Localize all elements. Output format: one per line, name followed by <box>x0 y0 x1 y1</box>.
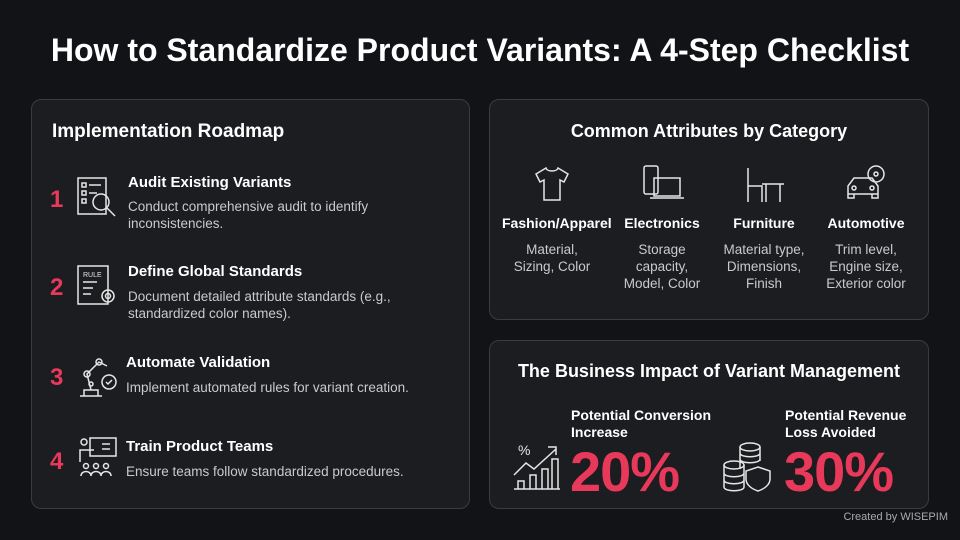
heading: roadmap: Implementation Roadmap <box>52 121 284 142</box>
category: automotive: Trim level, <box>835 242 897 257</box>
category: furniture: Finish <box>746 276 782 291</box>
stat: conversion <box>514 407 711 503</box>
step 1: 1 <box>50 186 63 213</box>
category: furniture: Material type, <box>723 242 805 257</box>
category: electronics <box>624 165 700 291</box>
step 1 <box>50 174 368 231</box>
step 4: 4 <box>50 448 63 475</box>
stat: revenue: Loss Avoided <box>785 424 876 440</box>
step 3: Automate Validation <box>126 354 270 371</box>
category: furniture: Furniture <box>733 215 795 231</box>
heading: attributes: Common Attributes by Category <box>571 121 847 141</box>
panel: common attributes <box>489 99 929 320</box>
step 3 <box>50 354 409 397</box>
panel: business impact <box>489 340 929 509</box>
icon: robot arm <box>80 358 117 397</box>
step 2 <box>50 263 391 321</box>
icon: growth chart <box>514 442 560 490</box>
step 4: Ensure teams follow standardized procedures. <box>126 464 404 479</box>
step 4: Train Product Teams <box>126 438 273 455</box>
icon: training <box>79 437 117 476</box>
step 2: 2 <box>50 274 63 301</box>
heading: impact: The Business Impact of Variant Management <box>518 361 900 381</box>
stat: revenue: Potential Revenue <box>785 407 906 423</box>
stat: revenue <box>723 407 906 503</box>
category: electronics: capacity, <box>636 259 688 274</box>
footer credit: Created by WISEPIM <box>843 511 948 523</box>
step 2: Define Global Standards <box>128 263 302 280</box>
category: automotive: Exterior color <box>826 276 906 291</box>
step 1: Conduct comprehensive audit to identify <box>128 199 368 214</box>
category: fashion: Material, <box>526 242 578 257</box>
stat: revenue: 30% <box>784 440 893 503</box>
step 4 <box>50 437 404 479</box>
step 3: Implement automated rules for variant creation. <box>126 380 409 395</box>
category: automotive <box>826 165 906 291</box>
icon: growth chart: % <box>518 442 530 458</box>
step 2: Document detailed attribute standards (e.g., <box>128 289 391 304</box>
category: electronics: Storage <box>638 242 686 257</box>
category: automotive: Engine size, <box>829 259 903 274</box>
stat: conversion: Potential Conversion <box>571 407 711 423</box>
title: How to Standardize Product Variants: A 4-Step Checklist <box>51 32 909 68</box>
category: fashion <box>502 166 612 274</box>
step 2: standardized color names). <box>128 306 291 321</box>
category: electronics: Electronics <box>624 215 700 231</box>
step 1: Audit Existing Variants <box>128 174 291 191</box>
category: automotive: Automotive <box>828 215 904 231</box>
category: electronics: Model, Color <box>624 276 700 291</box>
category: fashion: Sizing, Color <box>514 259 590 274</box>
category: furniture: Dimensions, <box>727 259 801 274</box>
icon: rule book: RULE <box>83 272 102 279</box>
panel: implementation roadmap <box>31 99 470 509</box>
category: furniture <box>723 168 805 291</box>
category: fashion: Fashion/Apparel <box>502 215 612 231</box>
icon: audit <box>77 177 116 216</box>
step 3: 3 <box>50 364 63 391</box>
step 1: inconsistencies. <box>128 216 223 231</box>
icon: coins shield <box>723 442 771 492</box>
stat: conversion: 20% <box>570 440 679 503</box>
stat: conversion: Increase <box>571 424 628 440</box>
icon: rule book <box>77 265 115 305</box>
